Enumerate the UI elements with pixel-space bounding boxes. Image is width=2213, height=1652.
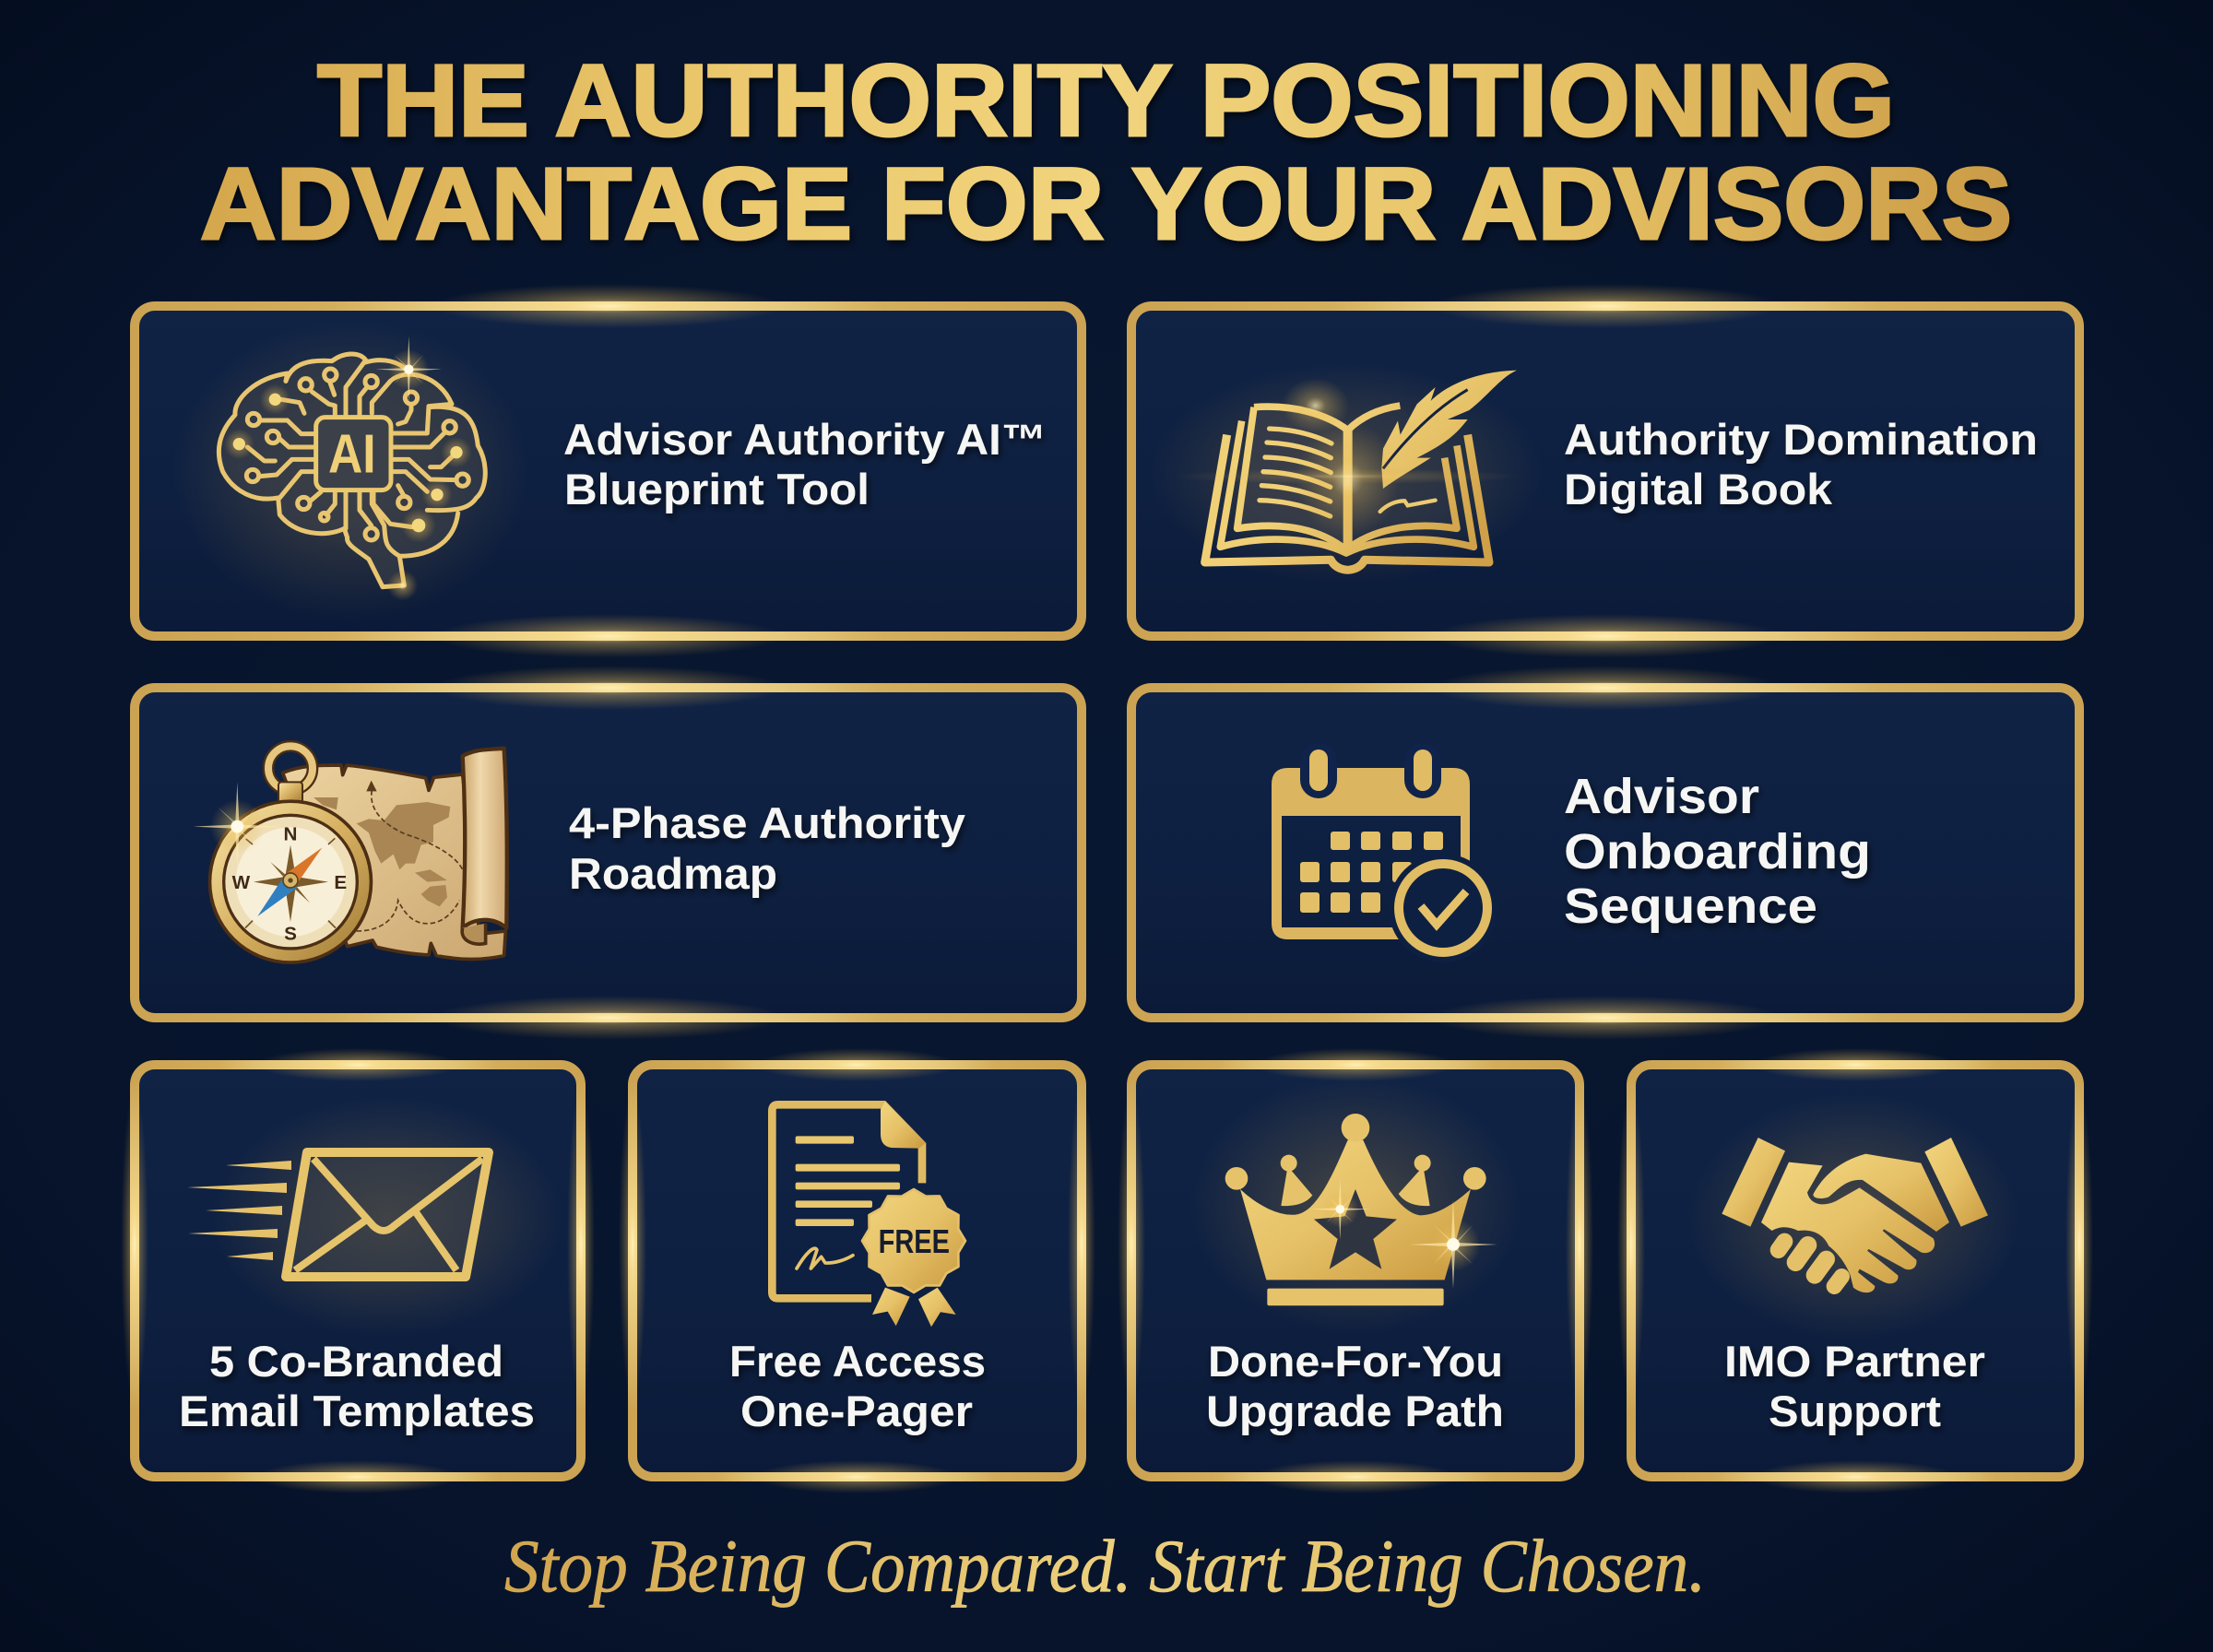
label: Blueprint Tool [564,465,870,513]
label: Free Access [729,1337,986,1386]
label: Sequence [1564,879,1817,934]
panel: 4-Phase Authority Roadmap [135,666,1082,1040]
icon: document with FREE badge: FREE [879,1222,950,1260]
label [729,1337,986,1435]
label [1564,415,2038,513]
icon: document with FREE badge [772,1102,965,1327]
panel: Advisor Authority AI Blueprint Tool [135,284,1082,658]
icon: handshake [1687,1094,2019,1339]
title [200,44,2012,261]
tagline: Stop Being Compared. Start Being Chosen. [504,1524,1706,1608]
label: Email Templates [179,1386,535,1435]
panel: 5 Co-Branded Email Templates [121,1048,595,1493]
panel: IMO Partner Support [1617,1048,2093,1493]
icon: AI brain [172,320,528,620]
icon: envelope with speed lines [187,1097,562,1337]
label: One-Pager [740,1386,973,1435]
icon: AI brain: AI [328,423,376,485]
label: Authority Domination [1564,415,2038,464]
label: Digital Book [1564,465,1833,513]
label: Support [1769,1386,1941,1435]
icon: crown with star [1189,1076,1521,1334]
label: 5 Co-Branded [209,1337,503,1386]
icon: compass and map: N [284,823,297,844]
label: 4-Phase Authority [569,798,965,847]
panel: Advisor Onboarding Sequence [1131,666,2079,1040]
label: Advisor Authority AI™ [563,415,1047,464]
panel: Authority Domination Digital Book [1131,284,2079,658]
panel: Free Access One-Pager [619,1048,1095,1493]
label [569,798,965,898]
icon: compass and map: W [232,872,251,893]
panel: Done-For-You Upgrade Path [1118,1048,1593,1493]
label: Upgrade Path [1206,1386,1504,1435]
label [1724,1337,1985,1435]
title: THE AUTHORITY POSITIONING [317,44,1895,158]
label [563,415,1047,513]
label: Done-For-You [1208,1337,1503,1386]
icon: compass and map: S [284,923,297,944]
label [1564,769,1871,934]
label: Onboarding [1564,824,1871,879]
icon: open book and quill [1150,362,1543,584]
label: IMO Partner [1724,1337,1985,1386]
label: Roadmap [569,849,777,898]
icon: compass and map: E [334,872,347,893]
label [179,1337,535,1435]
label: Advisor [1564,769,1759,824]
icon: calendar with check [1272,743,1497,962]
label [1206,1337,1504,1435]
icon: compass and map [193,746,507,964]
title: ADVANTAGE FOR YOUR ADVISORS [200,148,2012,261]
